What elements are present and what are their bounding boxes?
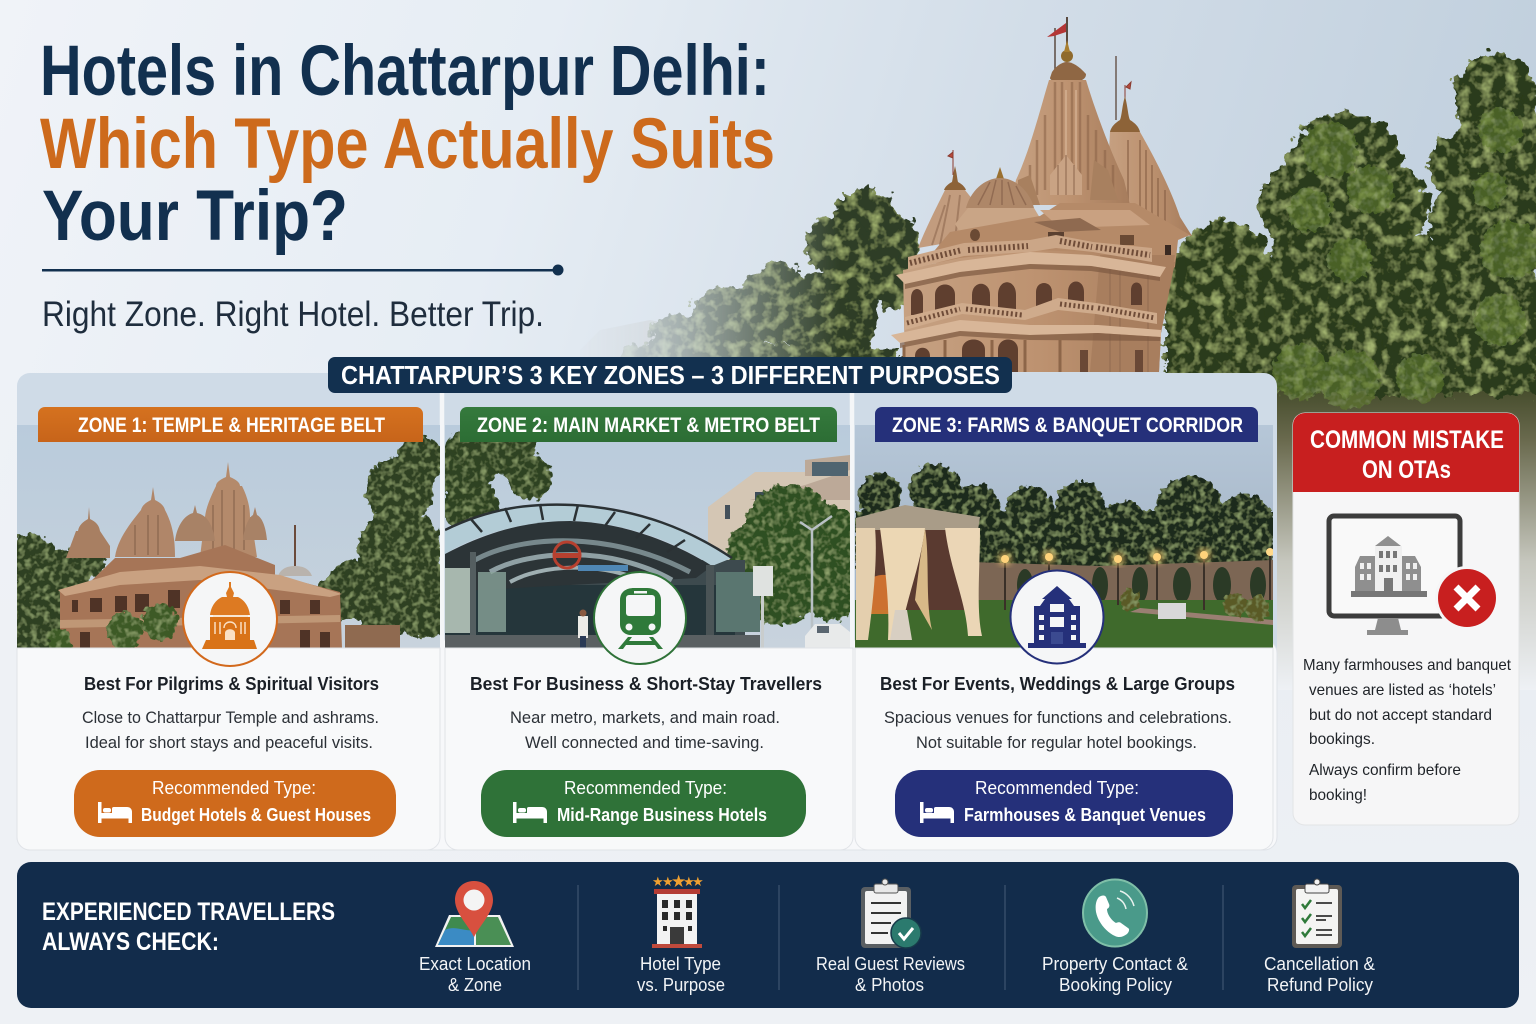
right spire bbox=[1115, 56, 1117, 120]
zone 3 recommended pill bbox=[895, 770, 1233, 837]
label: Cancellation & bbox=[1264, 954, 1375, 974]
title: Your Trip? bbox=[42, 177, 348, 256]
zone 3 recommended pill: Farmhouses & Banquet Venues bbox=[964, 805, 1206, 825]
lower background wash bbox=[0, 350, 1536, 1024]
zone 3 banner bbox=[875, 407, 1258, 442]
zone 2 photo bbox=[425, 424, 865, 648]
zone 1 recommended pill bbox=[74, 770, 396, 837]
zone 3 description: Spacious venues for functions and celebrations. bbox=[884, 708, 1232, 727]
zone 2 white section bbox=[445, 648, 853, 850]
zone 2 heading: Best For Business & Short-Stay Travellers bbox=[470, 673, 822, 694]
label: & Photos bbox=[855, 975, 924, 995]
label: Property Contact & bbox=[1042, 954, 1188, 974]
lower balcony bbox=[905, 298, 1157, 330]
panel: common mistake on OTAs bbox=[1293, 413, 1519, 825]
right tree highlights bbox=[1272, 108, 1536, 410]
label: vs. Purpose bbox=[637, 975, 725, 995]
zone 1 white section bbox=[17, 648, 440, 850]
red header: ON OTAs bbox=[1362, 456, 1451, 484]
label: & Zone bbox=[448, 975, 502, 995]
upper eave bbox=[896, 252, 1166, 284]
panel: zone 2 bbox=[425, 407, 865, 850]
icon: map pin bbox=[435, 881, 514, 947]
label: Real Guest Reviews bbox=[816, 954, 965, 974]
zone 1 description bbox=[82, 708, 379, 752]
panel: zone 3 bbox=[855, 407, 1274, 850]
warning text: bookings. bbox=[1309, 731, 1375, 748]
warning text bbox=[1303, 657, 1512, 804]
arches bbox=[911, 282, 1142, 372]
icon: hotel with stars: ★ bbox=[692, 874, 704, 889]
label bbox=[637, 954, 725, 995]
icon: banquet building badge bbox=[1010, 570, 1104, 664]
label: Booking Policy bbox=[1059, 975, 1172, 995]
item: cancellation policy bbox=[1264, 879, 1375, 995]
zone 1 photo bbox=[17, 425, 440, 648]
left small spire bbox=[948, 150, 953, 175]
zone 1 recommended pill: Recommended Type: bbox=[152, 778, 316, 798]
panel: experienced travellers checklist bar bbox=[17, 862, 1519, 1008]
subtitle: Right Zone. Right Hotel. Better Trip. bbox=[42, 295, 544, 334]
icon: checklist clipboard bbox=[1292, 879, 1342, 948]
zone 1 description: Close to Chattarpur Temple and ashrams. bbox=[82, 708, 379, 727]
left trees bbox=[620, 184, 920, 357]
hero photo: temple and trees bbox=[580, 17, 1536, 410]
zone 3 description: Not suitable for regular hotel bookings. bbox=[916, 733, 1197, 752]
label bbox=[1264, 954, 1375, 995]
red header bbox=[1293, 413, 1519, 492]
warning text: Always confirm before bbox=[1309, 762, 1461, 779]
zone 2 banner bbox=[460, 407, 837, 442]
upper storey bbox=[934, 203, 1190, 268]
zone 3 white section bbox=[855, 648, 1273, 850]
panel: three zones container bbox=[0, 373, 1277, 850]
zone 1 banner: ZONE 1: TEMPLE & HERITAGE BELT bbox=[78, 414, 385, 437]
icon: train badge bbox=[594, 572, 686, 664]
label bbox=[419, 954, 531, 995]
icon: hotel with stars: ★ bbox=[671, 872, 686, 891]
icon: hotel with stars: ★ bbox=[652, 874, 664, 889]
checklist heading bbox=[42, 898, 335, 956]
zone 3 recommended pill: Recommended Type: bbox=[975, 778, 1139, 798]
zone 3 heading: Best For Events, Weddings & Large Groups bbox=[880, 673, 1235, 694]
zone 1 banner bbox=[38, 407, 423, 442]
icon: hotel with stars: ★ bbox=[662, 874, 674, 889]
lower eave bbox=[891, 320, 1161, 343]
item: exact location bbox=[419, 881, 531, 995]
zone 1 recommended pill: Budget Hotels & Guest Houses bbox=[141, 805, 371, 825]
right gutter fading trees bbox=[1260, 370, 1536, 690]
icon: hotel with stars: ★ bbox=[683, 874, 695, 889]
zone 1 description: Ideal for short stays and peaceful visits. bbox=[85, 733, 373, 752]
item: real guest reviews bbox=[816, 879, 965, 995]
title: Hotels in Chattarpur Delhi: bbox=[40, 32, 770, 111]
icon: phone bbox=[1083, 880, 1147, 946]
item: property contact bbox=[1042, 880, 1188, 995]
main spire bbox=[1066, 17, 1068, 44]
zone 2 description: Well connected and time-saving. bbox=[525, 733, 764, 752]
temple bbox=[891, 17, 1192, 372]
zone 3 banner: ZONE 3: FARMS & BANQUET CORRIDOR bbox=[892, 414, 1243, 437]
central dome bbox=[996, 167, 1004, 179]
icon: hotel with stars bbox=[652, 872, 704, 948]
item: hotel type bbox=[637, 872, 725, 995]
icon: review clipboard bbox=[861, 879, 921, 948]
checklist heading: ALWAYS CHECK: bbox=[42, 928, 219, 956]
warning text: Many farmhouses and banquet bbox=[1303, 657, 1512, 674]
zone 2 description: Near metro, markets, and main road. bbox=[510, 708, 780, 727]
warning text: but do not accept standard bbox=[1309, 707, 1492, 724]
warning text: booking! bbox=[1309, 787, 1367, 804]
icon: monitor with crossed hotel bbox=[1329, 516, 1499, 635]
zone 2 recommended pill: Mid-Range Business Hotels bbox=[557, 805, 767, 825]
hotel building in monitor bbox=[1351, 536, 1427, 597]
zone 3 photo bbox=[855, 425, 1274, 648]
icon: temple badge bbox=[183, 572, 277, 666]
checklist heading: EXPERIENCED TRAVELLERS bbox=[42, 898, 335, 926]
distant building bbox=[624, 320, 658, 348]
upper balcony bbox=[908, 235, 1152, 270]
title: Which Type Actually Suits bbox=[40, 105, 775, 184]
main walls bbox=[903, 250, 1175, 372]
zone 1 heading: Best For Pilgrims & Spiritual Visitors bbox=[84, 673, 379, 694]
zone 2 recommended pill: Recommended Type: bbox=[564, 778, 727, 798]
zone 2 description bbox=[510, 708, 780, 752]
title rule with dot bbox=[42, 264, 564, 276]
zone 2 banner: ZONE 2: MAIN MARKET & METRO BELT bbox=[477, 414, 820, 437]
panel: zone 1 bbox=[0, 407, 463, 850]
warning text: venues are listed as ‘hotels’ bbox=[1309, 682, 1496, 699]
label bbox=[816, 954, 965, 995]
label: Hotel Type bbox=[640, 954, 721, 974]
right tree mass bbox=[1158, 53, 1536, 395]
label bbox=[1042, 954, 1188, 995]
zone 2 recommended pill bbox=[481, 770, 806, 837]
label: Refund Policy bbox=[1267, 975, 1373, 995]
title bbox=[40, 32, 775, 256]
label: Exact Location bbox=[419, 954, 531, 974]
section ribbon heading: CHATTARPUR’S 3 KEY ZONES – 3 DIFFERENT PURPOSES bbox=[341, 360, 1000, 390]
zone 3 description bbox=[884, 708, 1232, 752]
